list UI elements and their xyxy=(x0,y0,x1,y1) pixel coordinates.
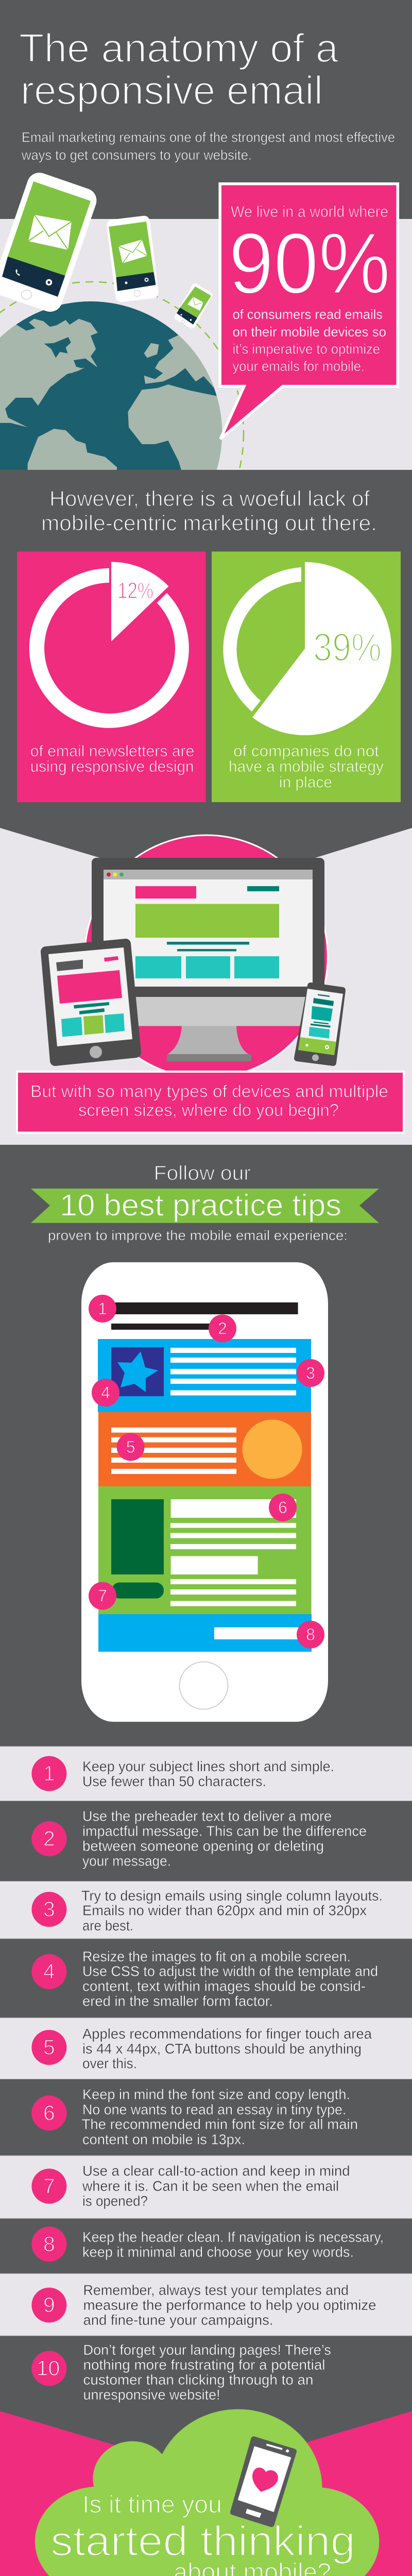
intro text xyxy=(21,130,395,163)
icon: small phone xyxy=(174,282,214,330)
tip 5: Apples recommendations for finger touch area xyxy=(82,2026,372,2042)
tip 4: Use CSS to adjust the width of the template and xyxy=(82,1963,378,1979)
tip 5: over this. xyxy=(82,2056,137,2072)
headline: started thinking xyxy=(50,2518,355,2565)
caption xyxy=(30,742,194,775)
email module: footer xyxy=(98,1614,312,1652)
callout: where do you begin: But with so many types of devices and multiple xyxy=(30,1082,388,1100)
intro text: Email marketing remains one of the strongest and most effective xyxy=(22,130,395,145)
title: The anatomy of a xyxy=(19,25,339,71)
tip 4: Resize the images to fit on a mobile screen. xyxy=(82,1948,351,1964)
tip 1: 1 xyxy=(43,1761,55,1785)
title: responsive email xyxy=(21,67,323,113)
banner: 10 best practice tips: 10 best practice tips xyxy=(60,1189,341,1223)
tip 1: Use fewer than 50 characters. xyxy=(82,1773,266,1789)
tip 5 xyxy=(0,2018,412,2079)
tip 9: and fine-tune your campaigns. xyxy=(83,2312,273,2328)
tip 4 xyxy=(0,1939,412,2018)
tip 7: Use a clear call-to-action and keep in mind xyxy=(82,2163,350,2179)
globe xyxy=(0,301,222,470)
tip 5: 5 xyxy=(43,2035,55,2059)
headline xyxy=(50,2490,355,2576)
callout: 90 percent speech bubble xyxy=(220,184,398,439)
markers: numbered pins: 3 xyxy=(306,1364,315,1382)
pink circle backdrop xyxy=(84,835,328,1078)
tip 10: Don’t forget your landing pages! There’s xyxy=(83,2342,331,2358)
tip 6: Keep in mind the font size and copy length. xyxy=(82,2087,350,2102)
chart: ring with 39 percent slice: 39% xyxy=(313,625,382,670)
callout: 90 percent speech bubble: 90% xyxy=(229,215,390,312)
callout: 90 percent speech bubble: it’s imperative to optimize xyxy=(233,341,380,357)
heading: However, there is a woeful lack of xyxy=(49,486,370,511)
tip 10: customer than clicking through to an xyxy=(83,2372,313,2387)
heading: follow our: Follow our xyxy=(153,1162,251,1184)
panel: hero section xyxy=(0,33,412,470)
subheading: proven to improve the mobile email experience: xyxy=(48,1228,348,1243)
chart: ring with 12 percent slice xyxy=(29,562,189,728)
tip 9: Remember, always test your templates and xyxy=(83,2282,349,2298)
email module: orange xyxy=(98,1412,311,1486)
tip 7 xyxy=(0,2156,412,2218)
heading xyxy=(41,486,377,535)
icon: phone with heart xyxy=(233,2439,294,2524)
tip 3: are best. xyxy=(82,1918,133,1934)
headline: Is it time you xyxy=(82,2490,222,2518)
caption: using responsive design xyxy=(30,757,194,775)
markers: numbered pins: 5 xyxy=(126,1438,135,1456)
markers: numbered pins: 6 xyxy=(278,1498,287,1517)
callout: 90 percent speech bubble: of consumers read emails xyxy=(233,307,383,322)
tip 6: No one wants to read an essay in tiny type. xyxy=(82,2102,346,2117)
tip 2 xyxy=(0,1801,412,1882)
panel: 12 percent xyxy=(17,551,206,802)
tip 2: Use the preheader text to deliver a more xyxy=(82,1808,332,1824)
tip 6: 6 xyxy=(43,2101,55,2125)
tip 9: 9 xyxy=(43,2293,55,2317)
tip 3 xyxy=(0,1882,412,1939)
markers: numbered pins: 4 xyxy=(101,1383,110,1402)
icon: tablet xyxy=(46,944,136,1061)
caption xyxy=(229,742,384,791)
icon: large phone xyxy=(0,170,100,315)
markers: numbered pins: 8 xyxy=(306,1625,315,1644)
tip 2: between someone opening or deleting xyxy=(82,1838,324,1854)
tip 7: where it is. Can it be seen when the email xyxy=(82,2178,339,2194)
tip 10 xyxy=(0,2336,412,2475)
icon: desktop monitor xyxy=(92,858,324,1061)
callout: 90 percent speech bubble: your emails for mobile. xyxy=(233,359,365,374)
panel: tips diagram section xyxy=(0,1145,412,1747)
email module: blue header xyxy=(98,1339,311,1412)
markers: numbered pins xyxy=(89,1295,324,1649)
tip 8: keep it minimal and choose your key words. xyxy=(82,2244,354,2260)
tip 4: 4 xyxy=(43,1960,55,1984)
chart: ring with 12 percent slice: 12% xyxy=(117,578,153,603)
tip 3: Try to design emails using single column layouts. xyxy=(81,1888,383,1904)
tip 1: Keep your subject lines short and simple. xyxy=(82,1758,334,1774)
tip 4: ered in the smaller form factor. xyxy=(82,1993,273,2009)
markers: numbered pins: 1 xyxy=(98,1299,107,1318)
tip 9 xyxy=(0,2274,412,2336)
email module: green xyxy=(98,1486,312,1614)
title xyxy=(19,25,339,113)
tip 3: Emails no wider than 620px and min of 320px xyxy=(82,1902,367,1919)
panel: 39 percent xyxy=(212,551,401,802)
tip 6: content on mobile is 13px. xyxy=(82,2131,245,2147)
caption: of companies do not xyxy=(233,742,379,760)
tip 1 xyxy=(0,1747,412,1801)
tip 10: unresponsive website! xyxy=(83,2386,220,2402)
tip 6: The recommended min font size for all main xyxy=(81,2116,358,2132)
tip 8: Keep the header clean. If navigation is necessary, xyxy=(82,2229,384,2245)
tip 8 xyxy=(0,2218,412,2274)
caption: in place xyxy=(279,773,332,791)
tip 6 xyxy=(0,2079,412,2156)
callout: 90 percent speech bubble: on their mobile devices so xyxy=(233,324,386,340)
tip 3: 3 xyxy=(43,1897,55,1921)
dashed orbit arc xyxy=(0,282,244,586)
icon: medium phone xyxy=(106,215,159,303)
panel: devices section xyxy=(0,828,412,1145)
tip 4: content, text within images should be consid- xyxy=(82,1978,366,1994)
caption: have a mobile strategy xyxy=(229,757,384,775)
tip 7: 7 xyxy=(43,2174,55,2198)
tip 5: is 44 x 44px, CTA buttons should be anything xyxy=(82,2041,362,2057)
tip 2: impactful message. This can be the difference xyxy=(82,1823,367,1839)
panel: mobile-centric statistics xyxy=(0,470,412,858)
tip 2: your message. xyxy=(82,1853,171,1869)
icon: smartphone xyxy=(297,986,343,1063)
tip 8: 8 xyxy=(43,2232,55,2256)
heading: mobile-centric marketing out there. xyxy=(41,511,377,535)
callout: 90 percent speech bubble: We live in a world where xyxy=(231,202,388,221)
tip 10: 10 xyxy=(37,2357,60,2380)
intro text: ways to get consumers to your website. xyxy=(21,147,252,163)
panel: tips list xyxy=(0,1747,412,2475)
callout: where do you begin: screen sizes, where do you begin? xyxy=(78,1100,339,1120)
tip 7: is opened? xyxy=(82,2193,148,2209)
markers: numbered pins: 7 xyxy=(98,1587,107,1605)
thought cloud xyxy=(35,2409,379,2576)
markers: numbered pins: 2 xyxy=(218,1319,227,1337)
tip 9: measure the performance to help you optimize xyxy=(83,2297,376,2313)
panel: footer call to action xyxy=(0,2409,412,2576)
callout: where do you begin xyxy=(17,1072,404,1132)
tip 2: 2 xyxy=(43,1827,55,1851)
tip 10: nothing more frustrating for a potential xyxy=(83,2357,325,2373)
chart: ring with 39 percent slice xyxy=(223,562,391,735)
diagram: annotated phone xyxy=(81,1262,328,1722)
caption: of email newsletters are xyxy=(30,742,194,760)
